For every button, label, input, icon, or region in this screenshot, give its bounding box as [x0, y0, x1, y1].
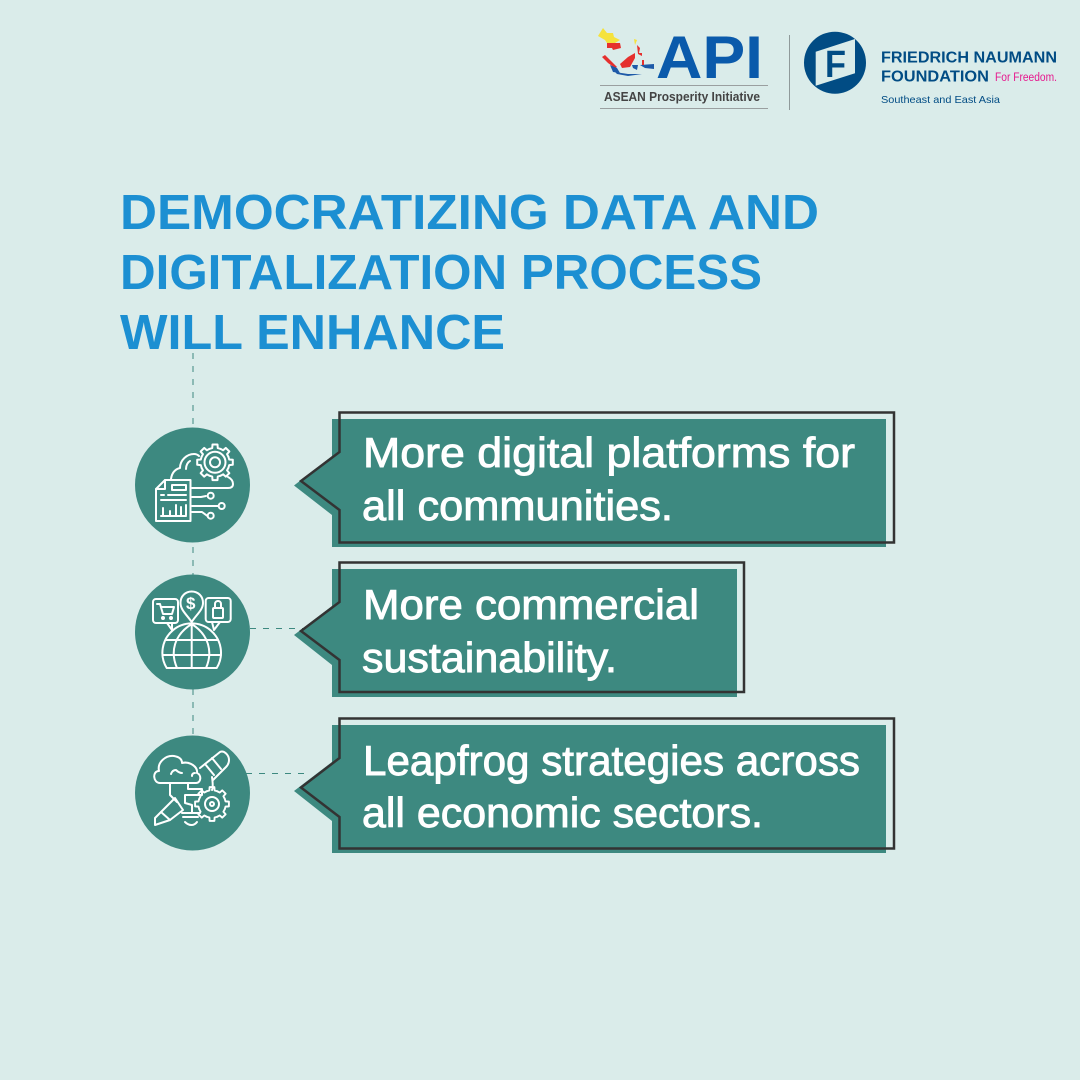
icon: FNF emblem: F	[825, 44, 846, 86]
logo: ASEAN Prosperity Initiative	[598, 24, 768, 108]
callout text: Leapfrog strategies across	[363, 737, 860, 784]
logo: Friedrich Naumann Foundation: FRIEDRICH NAUMANN	[881, 50, 1057, 67]
title	[120, 186, 819, 360]
callout box: all communities.	[362, 482, 673, 529]
callout box: sustainability.	[362, 634, 617, 681]
logo: Friedrich Naumann Foundation: For Freedom.	[995, 72, 1057, 84]
logo: Friedrich Naumann Foundation: FOUNDATION	[881, 68, 989, 85]
ASEAN Prosperity Initiative label: ASEAN Prosperity Initiative	[604, 89, 760, 104]
icon: globe with cart, price pin and lock	[135, 574, 250, 690]
icon: cloud, light bulb, pencil and gear	[135, 736, 250, 850]
callout text: More digital platforms for	[363, 429, 855, 476]
callout box	[294, 718, 894, 853]
icon: FNF emblem	[804, 32, 866, 94]
icon: cloud, gear, document and circuit	[135, 428, 250, 542]
callout box: all economic sectors.	[362, 789, 763, 836]
item 3: leapfrog strategies	[135, 718, 894, 853]
item 1: digital platforms	[135, 412, 894, 547]
title: DIGITALIZATION PROCESS	[120, 246, 762, 300]
API wordmark: API	[656, 24, 763, 91]
icon: globe with cart, price pin and lock: $	[186, 594, 196, 613]
logo: Friedrich Naumann Foundation: Southeast and East Asia	[881, 94, 1000, 106]
callout text: More commercial	[363, 581, 699, 628]
callout box	[294, 412, 894, 547]
icon: ASEAN map	[598, 28, 654, 76]
title: WILL ENHANCE	[120, 306, 505, 360]
title: DEMOCRATIZING DATA AND	[120, 186, 819, 240]
logo: Friedrich Naumann Foundation	[804, 32, 1057, 106]
callout box	[294, 562, 744, 697]
item 2: commercial sustainability	[135, 562, 744, 697]
